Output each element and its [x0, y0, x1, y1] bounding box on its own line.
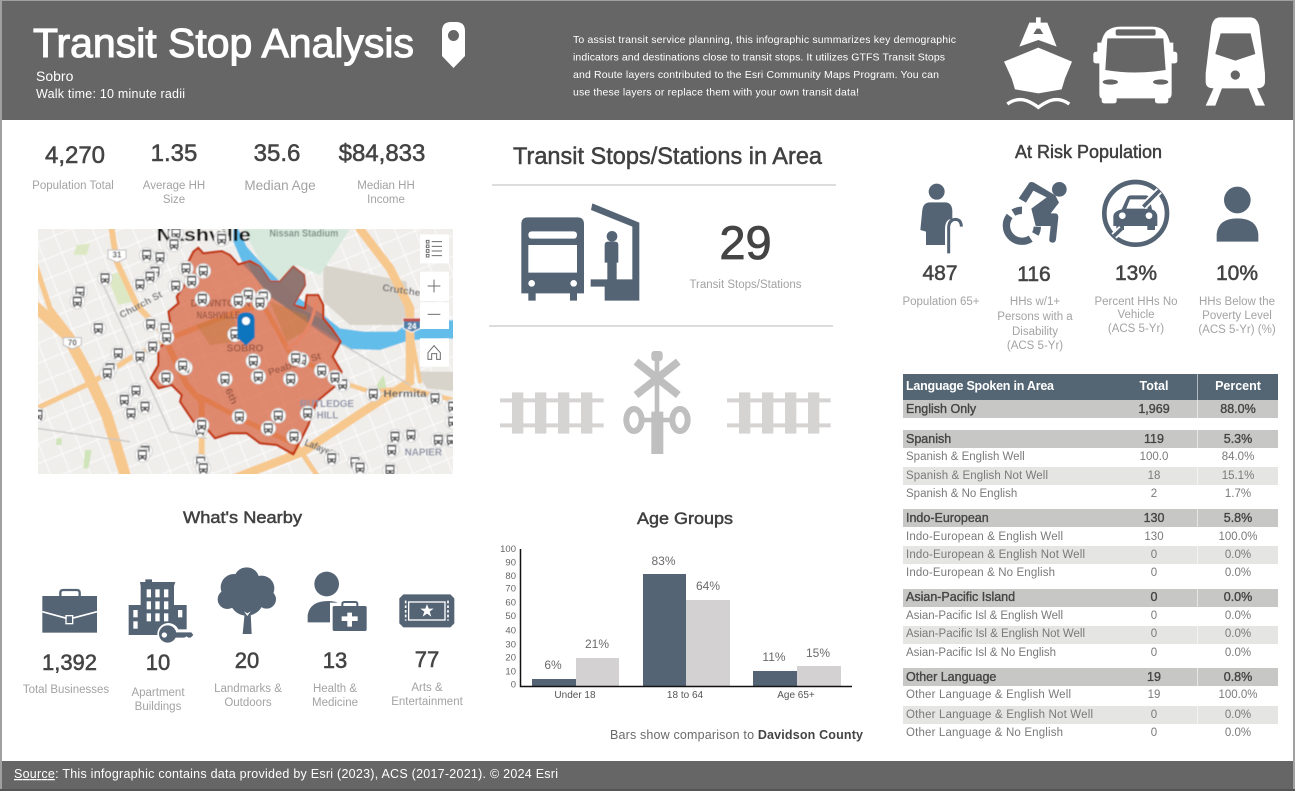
x axis labels: Age 65+	[777, 690, 815, 701]
title: Transit Stop Analysis	[33, 20, 414, 66]
row group: Spanish: Spanish	[906, 432, 951, 446]
row group: Spanish: 2	[1151, 488, 1157, 500]
stat: landmarks and outdoors	[214, 648, 282, 709]
row group: Other Language: 0.0%	[1225, 709, 1251, 721]
row group: Indo-European: Indo-European & English Not Well	[906, 549, 1085, 561]
stat: median age: Median Age	[244, 178, 316, 193]
row group: Spanish: 84.0%	[1222, 451, 1254, 463]
stat: average household size: Size	[163, 194, 185, 206]
icon: health person with medical bag	[308, 572, 369, 633]
icon: briefcase	[42, 590, 97, 633]
y axis labels: 20	[505, 652, 516, 664]
bar value labels: 21%	[585, 637, 609, 651]
stat: median income	[339, 140, 425, 206]
panel: at risk population	[902, 142, 1276, 352]
map: route shields	[63, 250, 421, 349]
header band	[2, 1, 1293, 120]
subtitle: place: Sobro	[36, 68, 74, 84]
row group: Other Language: 0.8%	[1224, 670, 1252, 684]
row: English only	[906, 402, 1256, 416]
y axis labels: 60	[505, 598, 516, 608]
row group: Asian-Pacific Island: Asian-Pacific Island	[906, 590, 1015, 604]
icon: rail crossing signal	[626, 351, 688, 454]
row group: Other Language: 0	[1151, 727, 1157, 739]
y axis labels: 30	[505, 640, 516, 650]
chart note: Bars show comparison to Davidson County	[610, 728, 863, 742]
y axis labels: 0	[511, 680, 516, 690]
y axis labels: 100	[500, 544, 516, 555]
map: list button	[420, 234, 449, 263]
row group: Indo-European: 0.0%	[1225, 567, 1251, 579]
row group: Spanish: Spanish & No English	[906, 488, 1017, 500]
stat: total businesses: 1,392	[42, 650, 97, 675]
map: DOWNTOWN	[191, 298, 251, 309]
x axis labels: 18 to 64	[667, 690, 704, 701]
row group: Asian-Pacific Island: 0.0%	[1225, 628, 1251, 640]
row group: Indo-European: 0	[1151, 549, 1157, 561]
intro paragraph: use these layers or replace them with your own transit data!	[573, 86, 859, 98]
intro paragraph: To assist transit service planning, this infographic summarizes key demographic	[573, 34, 956, 46]
row group: Indo-European: 0	[1151, 567, 1157, 579]
stat: households no vehicle: Vehicle	[1117, 309, 1155, 321]
stat: health and medicine: 13	[323, 648, 347, 673]
stat: households no vehicle: (ACS 5-Yr)	[1108, 323, 1164, 335]
icon: apartment building with key	[129, 579, 194, 645]
row group: Indo-European: 100.0%	[1218, 531, 1258, 543]
icon: senior with cane	[920, 184, 961, 253]
stat: transit stops count: Transit Stops/Stations	[689, 279, 802, 291]
row: English only: English Only	[906, 402, 977, 416]
row group: Spanish: 18	[1148, 470, 1160, 482]
row group: Other Language	[906, 670, 1258, 739]
icon: rail track left	[500, 392, 604, 434]
row group: Indo-European: Indo-European & English Well	[906, 531, 1063, 543]
row group: Asian-Pacific Island: 0	[1151, 590, 1158, 604]
stat: arts and entertainment: Entertainment	[391, 696, 464, 708]
stat: total businesses	[23, 650, 109, 696]
y axis labels: 80	[505, 571, 516, 582]
row group: Other Language: 19	[1148, 689, 1160, 701]
y axis labels: 50	[505, 611, 516, 622]
map: RUTLEDGE	[300, 399, 355, 410]
stat: arts and entertainment: Arts &	[411, 682, 443, 694]
icon: tree	[218, 567, 276, 634]
stat: population 65+: Population 65+	[902, 296, 980, 308]
row group: Other Language: Other Language & No English	[906, 727, 1063, 739]
row group: Indo-European	[906, 511, 1258, 579]
stat: landmarks and outdoors: Outdoors	[224, 697, 272, 709]
row group: Spanish: Spanish & English Well	[906, 451, 1025, 463]
row group: Indo-European: 0.0%	[1225, 549, 1251, 561]
map: route shields: 31	[113, 251, 122, 260]
table header	[903, 374, 1278, 400]
map: Hermita	[383, 389, 427, 400]
bar chart	[500, 544, 852, 701]
stat: households below poverty	[1198, 262, 1276, 336]
stat: households with disability: Disability	[1012, 326, 1058, 338]
map: NAPIER	[405, 448, 442, 459]
row group: Indo-European: 130	[1144, 511, 1164, 525]
stat: households with disability	[997, 263, 1073, 352]
row group: Asian-Pacific Island: Asian-Pacific Isl & English Well	[906, 610, 1063, 622]
bars: Davidson County	[576, 600, 841, 686]
stat: landmarks and outdoors: 20	[235, 648, 259, 673]
stat: average household size	[143, 140, 205, 206]
y axis labels: 10	[505, 666, 516, 678]
row group: Spanish: 1.7%	[1225, 488, 1251, 500]
stat: median age: 35.6	[254, 140, 300, 167]
map: walk-time polygon	[151, 248, 342, 454]
row group: Asian-Pacific Island: 0	[1151, 628, 1157, 640]
map: Nissan Stadium	[269, 228, 338, 239]
bars: selected area	[532, 574, 797, 686]
bar value labels: 64%	[696, 579, 720, 593]
row group: Spanish: 119	[1144, 432, 1164, 446]
bar value labels: 11%	[762, 650, 786, 664]
map: zoom in button	[420, 272, 449, 301]
stat: households with disability: Persons with a	[997, 311, 1073, 323]
map: transit stop markers	[31, 226, 460, 477]
map: route shields: 24	[408, 322, 417, 331]
row: English only: 1,969	[1138, 402, 1170, 416]
bar value labels: 83%	[651, 554, 676, 568]
row group: Asian-Pacific Island	[906, 590, 1252, 659]
bar value labels: 15%	[806, 646, 830, 660]
stat: population 65+: 487	[922, 262, 958, 285]
row group: Indo-European: 5.8%	[1224, 511, 1252, 525]
icon: location pin	[442, 22, 465, 68]
stat: landmarks and outdoors: Landmarks &	[214, 683, 282, 695]
stat: population total: Population Total	[32, 180, 114, 192]
heading: Transit Stops/Stations in Area	[513, 143, 823, 170]
map: HILL	[317, 410, 338, 421]
row group: Indo-European: Indo-European	[906, 511, 989, 525]
row group: Asian-Pacific Island: 0	[1151, 610, 1157, 622]
row group: Asian-Pacific Island: Asian-Pacific Isl & No English	[906, 647, 1056, 659]
row group: Indo-European: Indo-European & No English	[906, 567, 1055, 579]
heading: Age Groups	[637, 509, 733, 528]
map: roads	[33, 229, 460, 480]
map: river	[233, 229, 460, 350]
stat: arts and entertainment: 77	[415, 647, 439, 672]
row group: Other Language: Other Language & English Well	[906, 689, 1071, 701]
y axis labels: 90	[505, 558, 516, 568]
map: location marker	[237, 312, 255, 346]
row group: Other Language: Other Language	[906, 670, 996, 684]
row group: Asian-Pacific Island: 0.0%	[1225, 647, 1251, 659]
row group: Asian-Pacific Island: 0	[1151, 647, 1157, 659]
map: 6th	[222, 387, 239, 406]
table header: Language Spoken in Area	[906, 379, 1055, 393]
stat: median age	[244, 140, 316, 193]
row group: Spanish: 15.1%	[1222, 470, 1254, 482]
row group: Asian-Pacific Island: Asian-Pacific Isl & English Not Well	[906, 628, 1085, 640]
icon: person	[1217, 187, 1258, 242]
stat: households no vehicle: Percent HHs No	[1094, 296, 1178, 308]
stat: households below poverty: (ACS 5-Yr) (%)	[1198, 324, 1276, 336]
row bands	[903, 400, 1278, 686]
map: toolbar	[420, 234, 449, 367]
stat: apartment buildings: 10	[146, 650, 170, 675]
intro paragraph: indicators and destinations close to transit stops. It utilizes GTFS Transit Stops	[573, 52, 945, 64]
stat: average household size: Average HH	[143, 180, 205, 192]
stat: households no vehicle	[1094, 262, 1178, 335]
row group: Other Language: 100.0%	[1218, 689, 1258, 701]
heading: What's Nearby	[183, 508, 303, 527]
icon: wheelchair	[1006, 182, 1067, 243]
icon: no vehicle	[1104, 182, 1167, 245]
row group: Spanish: 5.3%	[1224, 432, 1252, 446]
icon: tram	[1206, 17, 1265, 106]
stat: health and medicine	[312, 648, 358, 709]
stat: apartment buildings: Buildings	[135, 701, 182, 713]
row group: Other Language: 0.0%	[1225, 727, 1251, 739]
y axis labels: 70	[505, 584, 516, 594]
icon: ticket	[399, 594, 454, 627]
intro paragraph	[573, 34, 956, 98]
x axis labels	[554, 690, 815, 701]
source note: Source: This infographic contains data provided by Esri (2023), ACS (2017-2021). © 2024 Esri	[14, 767, 558, 781]
intro paragraph: and Route layers contributed to the Esri Community Maps Program. You can	[573, 69, 939, 81]
subtitle: walk time: Walk time: 10 minute radii	[36, 87, 185, 101]
icon: ship	[1004, 17, 1072, 107]
map: zoom out button	[420, 302, 449, 329]
stat: average household size: 1.35	[151, 140, 197, 167]
icon: rail track right	[727, 392, 831, 434]
panel: age groups	[500, 509, 863, 742]
map	[30, 224, 460, 480]
row group: Spanish: 100.0	[1140, 451, 1168, 463]
stat: households no vehicle: 13%	[1115, 262, 1157, 285]
map: SOBRO	[227, 344, 264, 355]
heading: At Risk Population	[1015, 142, 1162, 162]
map: labels: Nashville	[157, 224, 251, 245]
icon: bus	[1093, 27, 1177, 103]
map: NASHVILLE	[197, 310, 240, 321]
row group: Other Language: Other Language & English Not Well	[906, 709, 1093, 721]
stat: apartment buildings	[131, 650, 185, 713]
panel: what's nearby	[23, 508, 464, 713]
stat: households below poverty: Poverty Level	[1202, 310, 1272, 322]
stat: households with disability: 116	[1017, 263, 1051, 286]
stat: apartment buildings: Apartment	[131, 687, 185, 699]
x axis labels: Under 18	[554, 690, 596, 701]
stat: health and medicine: Medicine	[312, 697, 358, 709]
map: home button	[420, 338, 449, 367]
row group: Other Language: 0	[1151, 709, 1157, 721]
map: Peabody St	[267, 351, 323, 379]
stat: arts and entertainment	[391, 647, 464, 708]
stat: total businesses: Total Businesses	[23, 684, 109, 696]
y axis labels: 40	[505, 626, 516, 636]
map: Crutche	[382, 283, 422, 299]
footer	[0, 761, 1295, 791]
map: Church St	[118, 289, 165, 321]
map: Lafayette	[303, 438, 341, 462]
stat: population 65+	[902, 262, 980, 308]
stat: transit stops count	[689, 216, 802, 291]
stat: population total	[32, 142, 114, 192]
table header: Total	[1140, 379, 1168, 393]
table header: Percent	[1215, 379, 1262, 393]
stat: households below poverty: 10%	[1216, 262, 1258, 285]
row group: Spanish	[906, 432, 1254, 500]
map: route shields: 70	[68, 339, 77, 348]
icon: bus at shelter	[521, 203, 639, 301]
table: language spoken	[903, 374, 1278, 739]
stat: transit stops count: 29	[719, 216, 772, 269]
row group: Asian-Pacific Island: 0.0%	[1224, 590, 1252, 604]
row group: Asian-Pacific Island: 0.0%	[1225, 610, 1251, 622]
bar value labels: 6%	[544, 658, 562, 672]
panel: transit stops and stations	[489, 143, 836, 454]
bar value labels	[544, 554, 830, 672]
stat: households below poverty: HHs Below the	[1199, 296, 1275, 308]
stat: median income: $84,833	[339, 140, 425, 167]
panel: key stats	[32, 140, 425, 206]
stat: health and medicine: Health &	[313, 683, 357, 695]
stat: median income: Income	[367, 194, 405, 206]
stat: households with disability: (ACS 5-Yr)	[1007, 340, 1063, 352]
stat: population total: 4,270	[45, 142, 105, 169]
stat: median income: Median HH	[357, 180, 415, 192]
row: English only: 88.0%	[1220, 402, 1256, 416]
stat: households with disability: HHs w/1+	[1010, 296, 1060, 308]
y axis labels	[500, 544, 516, 690]
row group: Other Language: 19	[1147, 670, 1161, 684]
row group: Spanish: Spanish & English Not Well	[906, 470, 1048, 482]
row group: Indo-European: 130	[1144, 531, 1164, 543]
